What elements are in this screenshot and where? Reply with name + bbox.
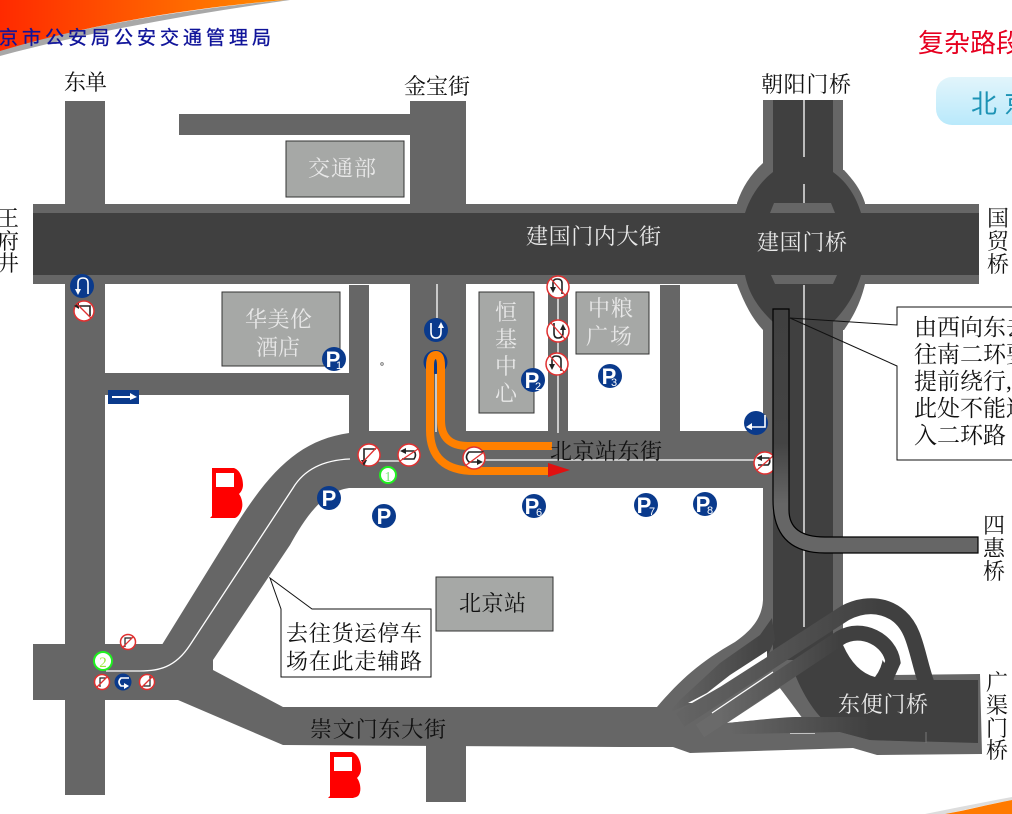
building: Hengji Centre: 中: [495, 354, 517, 379]
parking sign: P: [377, 504, 391, 529]
callout: freight parking note: [270, 578, 431, 677]
building: Hengji Centre: 基: [495, 327, 517, 352]
road labels: 国: [987, 206, 1009, 231]
gas station icon 1: [210, 468, 243, 518]
road labels: 贸: [987, 229, 1010, 254]
building: Hengji Centre: 心: [495, 381, 518, 406]
no-U-turn sign, station street: [463, 447, 485, 469]
no-turn sign top: [120, 634, 136, 650]
road labels: 东单: [64, 70, 107, 95]
building: Huameilun Hotel: [222, 292, 340, 366]
marker 1: 1: [384, 470, 392, 485]
callout: freight parking note: 场在此走辅路: [286, 649, 422, 674]
parking sign 3: 3: [611, 377, 617, 389]
road labels: 崇文门东大街: [310, 717, 446, 742]
road centre lines: [106, 100, 804, 671]
road labels: 桥: [986, 738, 1008, 763]
road labels: 四: [983, 513, 1005, 538]
road labels: 建国门桥: [757, 230, 847, 255]
road labels: 桥: [987, 252, 1009, 277]
sign: no turn, Dongdan: [74, 301, 94, 321]
parking sign 1: P: [326, 347, 340, 372]
parking sign 7: [634, 493, 658, 518]
parking sign 2: [521, 368, 545, 393]
sign: U-turn allowed, Dongdan: [70, 274, 94, 298]
building: Hengji Centre: 恒: [495, 300, 517, 325]
parking sign 1: 1: [336, 360, 342, 372]
no-turn sign bottom left: [94, 674, 110, 690]
building: Ministry of Transport: 交通部: [308, 156, 376, 181]
no-U-turn sign, junction right: [398, 444, 420, 466]
building: Huameilun Hotel: 酒店: [256, 335, 300, 360]
parking sign 3: [598, 364, 622, 389]
road labels: 惠: [983, 536, 1006, 561]
callout: east-bound detour note: 入二环路: [914, 423, 1006, 448]
building: Beijing Station: [436, 577, 553, 631]
no-U-turn sign C: [546, 353, 568, 375]
marker 2: 2: [99, 655, 107, 671]
interchange ramps at Dongbianmen: [668, 606, 978, 743]
parking sign 6: [522, 494, 546, 519]
no-U-turn sign B: [547, 320, 569, 342]
no-turn sign, junction left: [358, 444, 380, 466]
parking sign 8: P: [696, 492, 710, 517]
building: Hengji Centre: [479, 292, 534, 413]
parking sign 3: P: [602, 364, 616, 389]
marker 1: [380, 467, 396, 485]
parking sign 6: P: [525, 494, 539, 519]
callout: east-bound detour note: 提前绕行,: [914, 369, 1012, 394]
road labels: 桥: [983, 559, 1005, 584]
parking sign 7: P: [637, 493, 651, 518]
road labels: 建国门内大街: [526, 224, 661, 249]
orange detour route: [430, 355, 570, 477]
building: Beijing Station: 北京站: [459, 591, 526, 616]
road labels: 金宝街: [404, 74, 470, 99]
gas station icon 2: [328, 752, 361, 798]
sign: turn left arrow: [744, 411, 768, 435]
footer swoosh: [925, 797, 1012, 814]
header department name: 京市公安局公安交通管理局: [0, 27, 271, 49]
subtitle banner: [936, 77, 1012, 125]
building: COFCO Plaza: 中粮: [588, 296, 633, 321]
callout: freight parking note: 去往货运停车: [286, 621, 422, 646]
no-U-turn sign A: [547, 276, 569, 298]
U-turn sign bottom: [114, 674, 132, 690]
sign: one-way arrow: [108, 390, 139, 404]
parking sign 8: [693, 492, 717, 517]
building: COFCO Plaza: [576, 292, 649, 354]
parking sign 2: 2: [535, 381, 541, 393]
building: Huameilun Hotel: 华美伦: [245, 307, 312, 332]
building: Ministry of Transport: [286, 141, 404, 197]
road labels: 东便门桥: [838, 692, 928, 717]
parking sign: [372, 504, 396, 529]
no-turn sign bottom right: [140, 674, 154, 690]
road labels: 广: [986, 670, 1008, 695]
parking sign: [317, 486, 341, 511]
header swoosh: [0, 0, 290, 56]
parking sign 1: [322, 347, 346, 372]
parking sign 8: 8: [707, 505, 713, 517]
Beijing Station East Street label: 北京站东街: [550, 439, 662, 464]
building: COFCO Plaza: 广场: [586, 324, 632, 349]
callout: east-bound detour note: [790, 307, 1012, 460]
marker 2: [94, 652, 112, 671]
road labels: 门: [986, 716, 1008, 741]
parking sign: P: [322, 486, 336, 511]
parking sign 7: 7: [649, 506, 655, 518]
highlighted route to Sihui: [773, 309, 978, 553]
road labels: 渠: [986, 693, 1008, 718]
parking sign 6: 6: [536, 507, 542, 519]
no-U-turn sign, east end: [754, 452, 776, 474]
road labels: 朝阳门桥: [761, 72, 851, 97]
small point marker: [381, 363, 383, 365]
sign: U-turn allowed, Jinbao Street: [424, 318, 448, 342]
parking sign 2: P: [525, 368, 539, 393]
sign: blue marker under route: [424, 350, 448, 374]
